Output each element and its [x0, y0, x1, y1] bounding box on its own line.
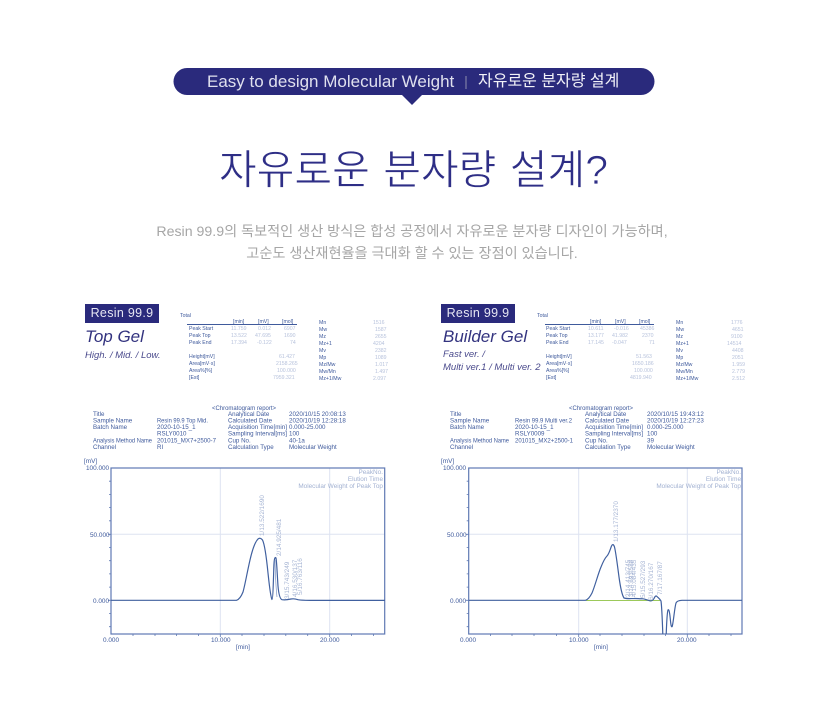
summary table: Builder Gel: Mp — [676, 355, 683, 361]
chart: Builder Gel chromatogram: Molecular Weight of Peak Top — [656, 483, 741, 490]
report header: Top Gel: Calculation Type — [228, 444, 274, 451]
report header: Top Gel: RSLY0010 — [157, 430, 187, 438]
summary table: Top Gel: 7959.321 — [273, 375, 295, 381]
summary table: Builder Gel: 45386 — [640, 326, 655, 332]
chart: Builder Gel chromatogram: 10.000 — [569, 637, 589, 644]
report header: Top Gel — [93, 405, 346, 451]
chart: Builder Gel chromatogram: 100.000 — [443, 465, 467, 472]
summary table: Top Gel: Mp — [319, 355, 326, 361]
description: 고순도 생산재현율을 극대화 할 수 있는 장점이 있습니다. — [246, 246, 578, 262]
report header: Builder Gel: 0.000-25.000 — [647, 424, 684, 431]
badge: Resin 99.9 — [441, 304, 515, 323]
summary table: Builder Gel: 2051 — [732, 355, 744, 361]
summary table: Builder Gel: Peak Start — [546, 326, 571, 332]
report header: Top Gel: Channel — [93, 444, 116, 451]
summary table: Builder Gel: Mz+1/Mw — [676, 376, 699, 382]
summary table: Top Gel: 100.000 — [277, 368, 296, 374]
chart: Builder Gel chromatogram: [mV] — [441, 458, 454, 465]
summary table: Top Gel: 47.695 — [255, 333, 271, 339]
report header: Top Gel: Batch Name — [93, 424, 128, 431]
chart: Top Gel chromatogram — [84, 458, 385, 651]
report header: Top Gel: Cup No. — [228, 438, 251, 444]
chart: Builder Gel chromatogram: 4/15.084/435 — [631, 559, 638, 597]
report header: Builder Gel: 201015_MX2+2500-1 — [515, 438, 574, 444]
product grades — [443, 349, 540, 372]
summary table: Top Gel: [mV] — [258, 319, 269, 325]
summary table: Top Gel: 6907 — [284, 326, 296, 332]
summary table: Top Gel: Mz+1/Mw — [319, 376, 342, 382]
summary table: Builder Gel: 41.982 — [612, 333, 628, 339]
badge: Resin 99.9: Resin 99.9 — [447, 306, 509, 320]
report header: Builder Gel: Sample Name — [450, 418, 490, 424]
report header: Builder Gel: Analysis Method Name — [450, 438, 510, 444]
product name: Top Gel — [85, 327, 144, 346]
summary table: Top Gel: 1690 — [284, 333, 296, 339]
chart: Top Gel chromatogram: 50.000 — [90, 532, 110, 539]
pill text korean: 자유로운 분자량 설계 — [478, 73, 619, 90]
report header: Top Gel: Analytical Date — [228, 411, 270, 418]
summary table: Top Gel: Area[mV·s] — [189, 361, 216, 367]
summary table: Top Gel: 2.097 — [373, 376, 386, 382]
report header: Builder Gel: 2020/10/19 12:27:23 — [647, 418, 704, 424]
summary table: Builder Gel: Peak Top — [546, 333, 568, 339]
summary table: Top Gel: Area%[%] — [189, 368, 213, 374]
product grades: Multi ver.1 / Multi ver. 2 — [443, 362, 540, 372]
chart: Builder Gel chromatogram: PeakNo. — [716, 469, 741, 476]
report header: Top Gel: Sampling Interval[ms] — [228, 430, 287, 438]
summary table: Top Gel: Mz+1 — [319, 341, 332, 347]
summary table: Top Gel: -0.122 — [257, 340, 272, 346]
title: 자유로운 분자량 설계? — [219, 147, 608, 193]
summary table: Builder Gel: 10.611 — [588, 326, 604, 332]
chart: Top Gel chromatogram: 2/14.925/481 — [276, 518, 283, 556]
report header: Builder Gel: Sampling Interval[ms] — [585, 430, 643, 438]
chart: Top Gel chromatogram: 4/16.530/137 — [292, 559, 299, 597]
summary table: Builder Gel: Peak End — [546, 340, 569, 346]
summary table: Builder Gel: [mV] — [615, 319, 626, 325]
report header: Top Gel: Resin 99.9 Top Mid. — [157, 418, 208, 424]
report header: Builder Gel: Cup No. — [585, 438, 608, 444]
summary table: Top Gel: [mol] — [282, 319, 294, 325]
report header: Top Gel: 2020/10/15 20:08:13 — [289, 411, 346, 418]
summary table: Builder Gel: Total — [537, 313, 548, 319]
summary table: Builder Gel: 71 — [649, 340, 655, 346]
chart: Builder Gel chromatogram: 2/14.413/745 — [625, 559, 632, 597]
summary table: Top Gel: Mz — [319, 334, 326, 340]
report header: Builder Gel: Analytical Date — [585, 411, 627, 418]
report header: Top Gel: 2020/10/19 12:28:18 — [289, 418, 346, 424]
summary table: Builder Gel: 13.177 — [588, 333, 604, 339]
report header: Top Gel: Analysis Method Name — [93, 438, 153, 444]
summary table: Top Gel: 1587 — [375, 327, 387, 333]
summary table: Top Gel: [Est] — [189, 375, 200, 381]
summary table: Top Gel — [180, 313, 388, 382]
summary table: Builder Gel: Mn — [676, 320, 683, 326]
summary table: Top Gel: Mw — [319, 327, 327, 333]
summary table: Top Gel: 2158.265 — [276, 361, 298, 367]
summary table: Top Gel: [min] — [233, 319, 245, 325]
chart: Builder Gel chromatogram: 3/14.693/588 — [628, 559, 635, 597]
summary table: Top Gel: 0.012 — [258, 326, 271, 332]
report header: Top Gel: 100 — [289, 430, 300, 438]
report header: Builder Gel: 2020/10/15 19:43:12 — [647, 411, 704, 418]
summary table: Builder Gel: 17.145 — [588, 340, 604, 346]
summary table: Top Gel: 1089 — [375, 355, 387, 361]
summary table: Builder Gel: 4651 — [732, 327, 744, 333]
summary table: Top Gel: Mz/Mw — [319, 362, 336, 368]
summary table: Builder Gel: 9100 — [731, 334, 743, 340]
chart: Builder Gel chromatogram: 20.000 — [677, 637, 697, 644]
summary table: Top Gel: Total — [180, 313, 191, 319]
summary table: Builder Gel: Mw/Mn — [676, 369, 693, 375]
chart: Builder Gel chromatogram — [441, 458, 742, 651]
chart: Top Gel chromatogram: 100.000 — [86, 465, 110, 472]
report header: Builder Gel: Title — [450, 411, 462, 418]
chart: Builder Gel chromatogram: 0.000 — [450, 598, 466, 605]
summary table: Top Gel: 2655 — [375, 334, 387, 340]
chart: Top Gel chromatogram: 10.000 — [211, 637, 231, 644]
summary table: Builder Gel: 2.779 — [732, 369, 745, 375]
product grades: High. / Mid. / Low. — [85, 350, 161, 361]
summary table: Top Gel: Peak Top — [189, 333, 211, 339]
summary table: Builder Gel: Area[mV·s] — [546, 361, 573, 367]
report header: Builder Gel: RSLY0009 — [515, 430, 545, 438]
summary table: Builder Gel: 4819.940 — [630, 375, 652, 381]
report header: Top Gel: Title — [93, 411, 105, 418]
summary table: Top Gel: 17.394 — [231, 340, 247, 346]
summary table: Builder Gel: Mv — [676, 348, 683, 354]
summary table: Top Gel: 13.522 — [231, 333, 247, 339]
badge: Resin 99.9 — [85, 304, 159, 323]
summary table: Builder Gel: 2370 — [642, 333, 654, 339]
panel: Builder Gel — [441, 304, 540, 372]
chart: Builder Gel chromatogram: [min] — [594, 644, 608, 651]
report header: Top Gel: 201015_MX7+2500-7 — [157, 438, 217, 444]
badge: Resin 99.9: Resin 99.9 — [91, 306, 153, 320]
header pill — [174, 68, 654, 105]
pill text english: Easy to design Molecular Weight — [207, 72, 454, 91]
summary table: Builder Gel — [537, 313, 745, 382]
summary table: Builder Gel: Mw — [676, 327, 684, 333]
chart: Top Gel chromatogram: PeakNo. — [358, 469, 383, 476]
chart: Builder Gel chromatogram: 7/17.167/87 — [657, 561, 664, 595]
product grades: Fast ver. / — [443, 349, 485, 360]
chart: Top Gel chromatogram: 3/15.743/249 — [284, 561, 291, 599]
chart: Builder Gel chromatogram: 6/16.270/167 — [648, 562, 655, 600]
chart: Top Gel chromatogram: Elution Time — [348, 476, 383, 483]
summary table: Builder Gel: Mz/Mw — [676, 362, 693, 368]
summary table: Top Gel: 11.759 — [231, 326, 247, 332]
summary table: Builder Gel: 4408 — [732, 348, 744, 354]
summary table: Builder Gel: Area%[%] — [546, 368, 570, 374]
summary table: Top Gel: 2382 — [375, 348, 387, 354]
panel: Top Gel — [85, 304, 161, 361]
report header: Top Gel: 2020-10-15_1 — [157, 424, 196, 431]
summary table: Builder Gel: 1776 — [731, 320, 743, 326]
chart: Top Gel chromatogram: [min] — [236, 644, 250, 651]
summary table: Builder Gel: -0.016 — [614, 326, 629, 332]
report header: Builder Gel: Acquisition Time[min] — [585, 424, 643, 431]
summary table: Top Gel: 61.427 — [279, 354, 295, 360]
summary table: Top Gel: 1516 — [373, 320, 385, 326]
chart: Builder Gel chromatogram: 50.000 — [447, 532, 467, 539]
summary table: Builder Gel: 2.512 — [732, 376, 745, 382]
report header: Top Gel: 0.000-25.000 — [289, 424, 326, 431]
report header: Builder Gel: 2020-10-15_1 — [515, 424, 554, 431]
report header: Top Gel: RI — [157, 444, 163, 451]
report header: Builder Gel: Molecular Weight — [647, 444, 695, 451]
report header: Top Gel: <Chromatogram report> — [212, 405, 276, 412]
summary table: Builder Gel: 1650.186 — [632, 361, 654, 367]
description — [156, 224, 668, 262]
chart: Builder Gel chromatogram: Elution Time — [706, 476, 741, 483]
report header: Builder Gel: 100 — [647, 430, 658, 438]
chart: Top Gel chromatogram: 0.000 — [103, 637, 119, 644]
summary table: Builder Gel: [min] — [590, 319, 602, 325]
summary table: Builder Gel: [Est] — [546, 375, 557, 381]
chart: Top Gel chromatogram: [mV] — [84, 458, 97, 465]
summary table: Builder Gel: 51.563 — [636, 354, 652, 360]
chart: Builder Gel chromatogram: 1/13.177/2370 — [613, 501, 620, 542]
chart: Top Gel chromatogram: 1/13.522/1690 — [259, 495, 266, 536]
report header: Builder Gel: Calculation Type — [585, 444, 631, 451]
summary table: Top Gel: Mv — [319, 348, 326, 354]
summary table: Top Gel: Peak Start — [189, 326, 214, 332]
summary table: Top Gel: 1.497 — [375, 369, 388, 375]
report header: Builder Gel — [450, 405, 704, 451]
summary table: Builder Gel: Mz+1 — [676, 341, 689, 347]
chart: Top Gel chromatogram: Molecular Weight of Peak Top — [298, 483, 383, 490]
summary table: Builder Gel: 14514 — [727, 341, 742, 347]
report header: Top Gel: Molecular Weight — [289, 444, 337, 451]
report header: Builder Gel: 39 — [647, 438, 654, 444]
report header: Top Gel: Calculated Date — [228, 418, 273, 424]
summary table: Top Gel: Peak End — [189, 340, 212, 346]
report header: Builder Gel: Channel — [450, 444, 473, 451]
summary table: Top Gel: 1.017 — [375, 362, 388, 368]
chart: Top Gel chromatogram: 20.000 — [320, 637, 340, 644]
report header: Builder Gel: Batch Name — [450, 424, 485, 431]
description: Resin 99.9의 독보적인 생산 방식은 합성 공정에서 자유로운 분자량 디자인이 가능하며, — [156, 224, 668, 240]
chart: Builder Gel chromatogram: 5/15.527/293 — [640, 560, 647, 598]
summary table: Builder Gel: -0.047 — [612, 340, 627, 346]
summary table: Builder Gel: 1.959 — [732, 362, 745, 368]
report header: Top Gel: Sample Name — [93, 418, 133, 424]
summary table: Builder Gel: [mol] — [639, 319, 651, 325]
report header: Builder Gel: Calculated Date — [585, 418, 630, 424]
summary table: Top Gel: Mw/Mn — [319, 369, 336, 375]
chart: Top Gel chromatogram: 5/16.763/116 — [297, 558, 304, 595]
product name: Builder Gel — [443, 327, 527, 346]
chart: Builder Gel chromatogram: 0.000 — [460, 637, 476, 644]
chart: Top Gel chromatogram: 0.000 — [93, 598, 109, 605]
report header: Top Gel: Acquisition Time[min] — [228, 424, 287, 431]
report header: Builder Gel: <Chromatogram report> — [569, 405, 633, 412]
summary table: Builder Gel: 100.000 — [634, 368, 653, 374]
report header: Builder Gel: Resin 99.9 Multi ver.2 — [515, 418, 573, 424]
summary table: Top Gel: 74 — [290, 340, 296, 346]
summary table: Builder Gel: Mz — [676, 334, 683, 340]
report header: Top Gel: 40-1a — [289, 438, 305, 444]
summary table: Top Gel: Height[mV] — [189, 354, 215, 360]
summary table: Top Gel: Mn — [319, 320, 326, 326]
summary table: Builder Gel: Height[mV] — [546, 354, 572, 360]
summary table: Top Gel: 4204 — [373, 341, 385, 347]
